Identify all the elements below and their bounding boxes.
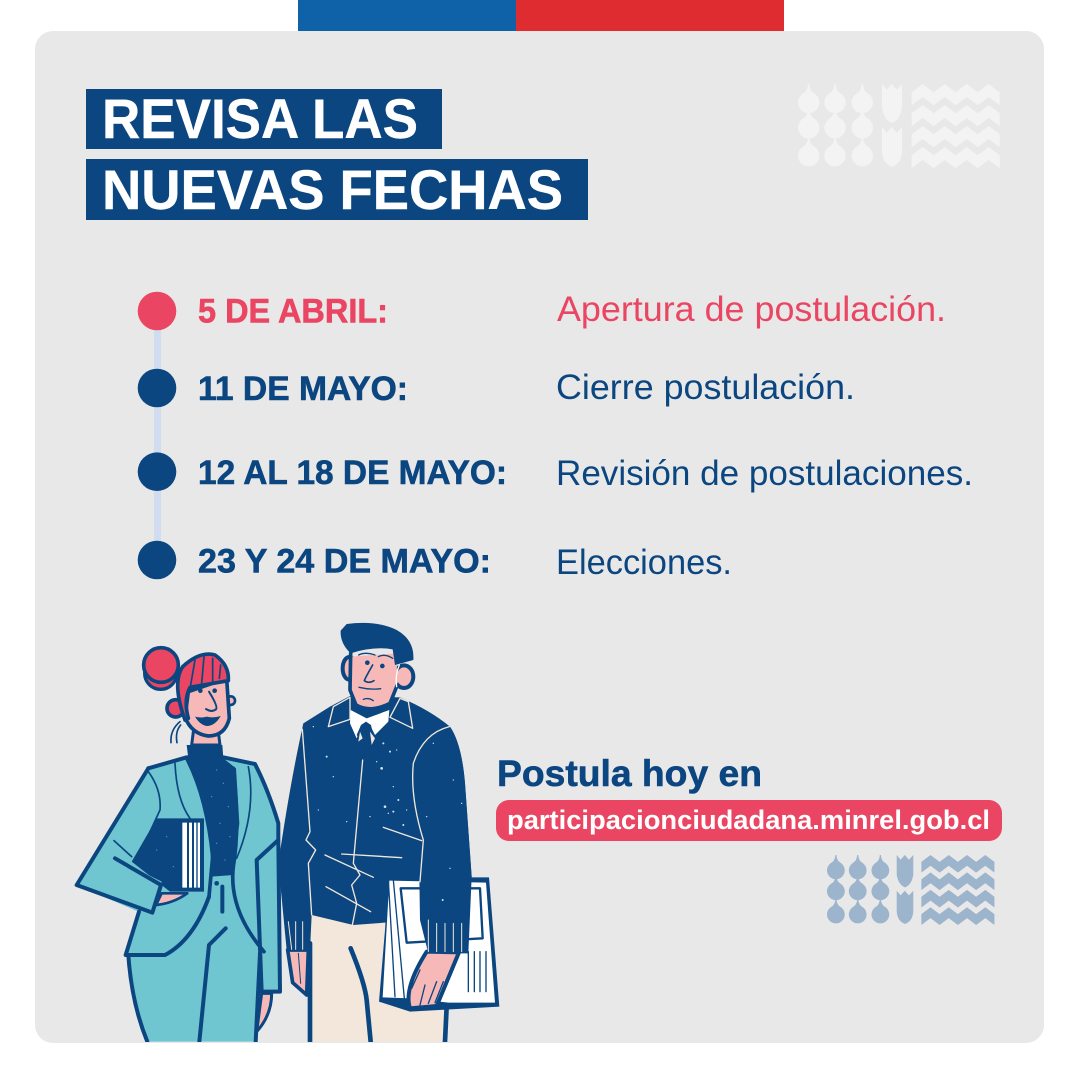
woman figure	[77, 648, 280, 1042]
papers	[379, 877, 499, 1012]
heading: revisa las nuevas fechas	[86, 87, 588, 221]
woman sweater and book texture	[156, 769, 231, 867]
timeline row: 12 al 18 de mayo: Revisión de postulaciones.	[556, 454, 973, 493]
url pill: participacionciudadana.minrel.gob.cl	[507, 805, 990, 835]
timeline row: 23 y 24 de mayo: Elecciones.	[556, 543, 732, 582]
man jacket speckle texture	[313, 726, 462, 901]
timeline row: 12 al 18 de mayo	[138, 452, 973, 493]
timeline row: 11 de mayo: 11 DE MAYO:	[198, 370, 408, 408]
timeline row: 5 de abril	[138, 290, 946, 331]
man figure	[278, 623, 499, 1042]
man right sleeve	[419, 742, 472, 954]
timeline row: 23 y 24 de mayo	[138, 541, 732, 582]
timeline row: 12 al 18 de mayo: 12 AL 18 DE MAYO:	[198, 454, 507, 492]
man halo	[286, 732, 302, 815]
url pill	[496, 800, 1002, 841]
woman suit fill	[77, 757, 280, 1042]
timeline row: 11 de mayo	[138, 368, 855, 408]
timeline row: 5 de abril: Apertura de postulación.	[557, 290, 946, 329]
timeline	[138, 290, 973, 582]
man jacket body	[278, 696, 472, 952]
call to action: postula hoy en: Postula hoy en	[497, 753, 762, 794]
icon: decorative motif bottom right	[827, 855, 994, 925]
timeline row: 11 de mayo: Cierre postulación.	[556, 368, 855, 407]
top flag bar	[298, 0, 784, 31]
timeline row: 23 y 24 de mayo: 23 Y 24 DE MAYO:	[198, 543, 491, 581]
heading line 1: REVISA LAS	[102, 87, 418, 150]
illustration: two people	[77, 623, 499, 1042]
timeline connector	[154, 320, 161, 560]
man jacket seams	[302, 727, 449, 925]
icon: decorative motif top right	[798, 84, 1000, 168]
heading line 2: NUEVAS FECHAS	[102, 158, 563, 221]
timeline row: 5 de abril: 5 DE ABRIL:	[198, 293, 388, 331]
